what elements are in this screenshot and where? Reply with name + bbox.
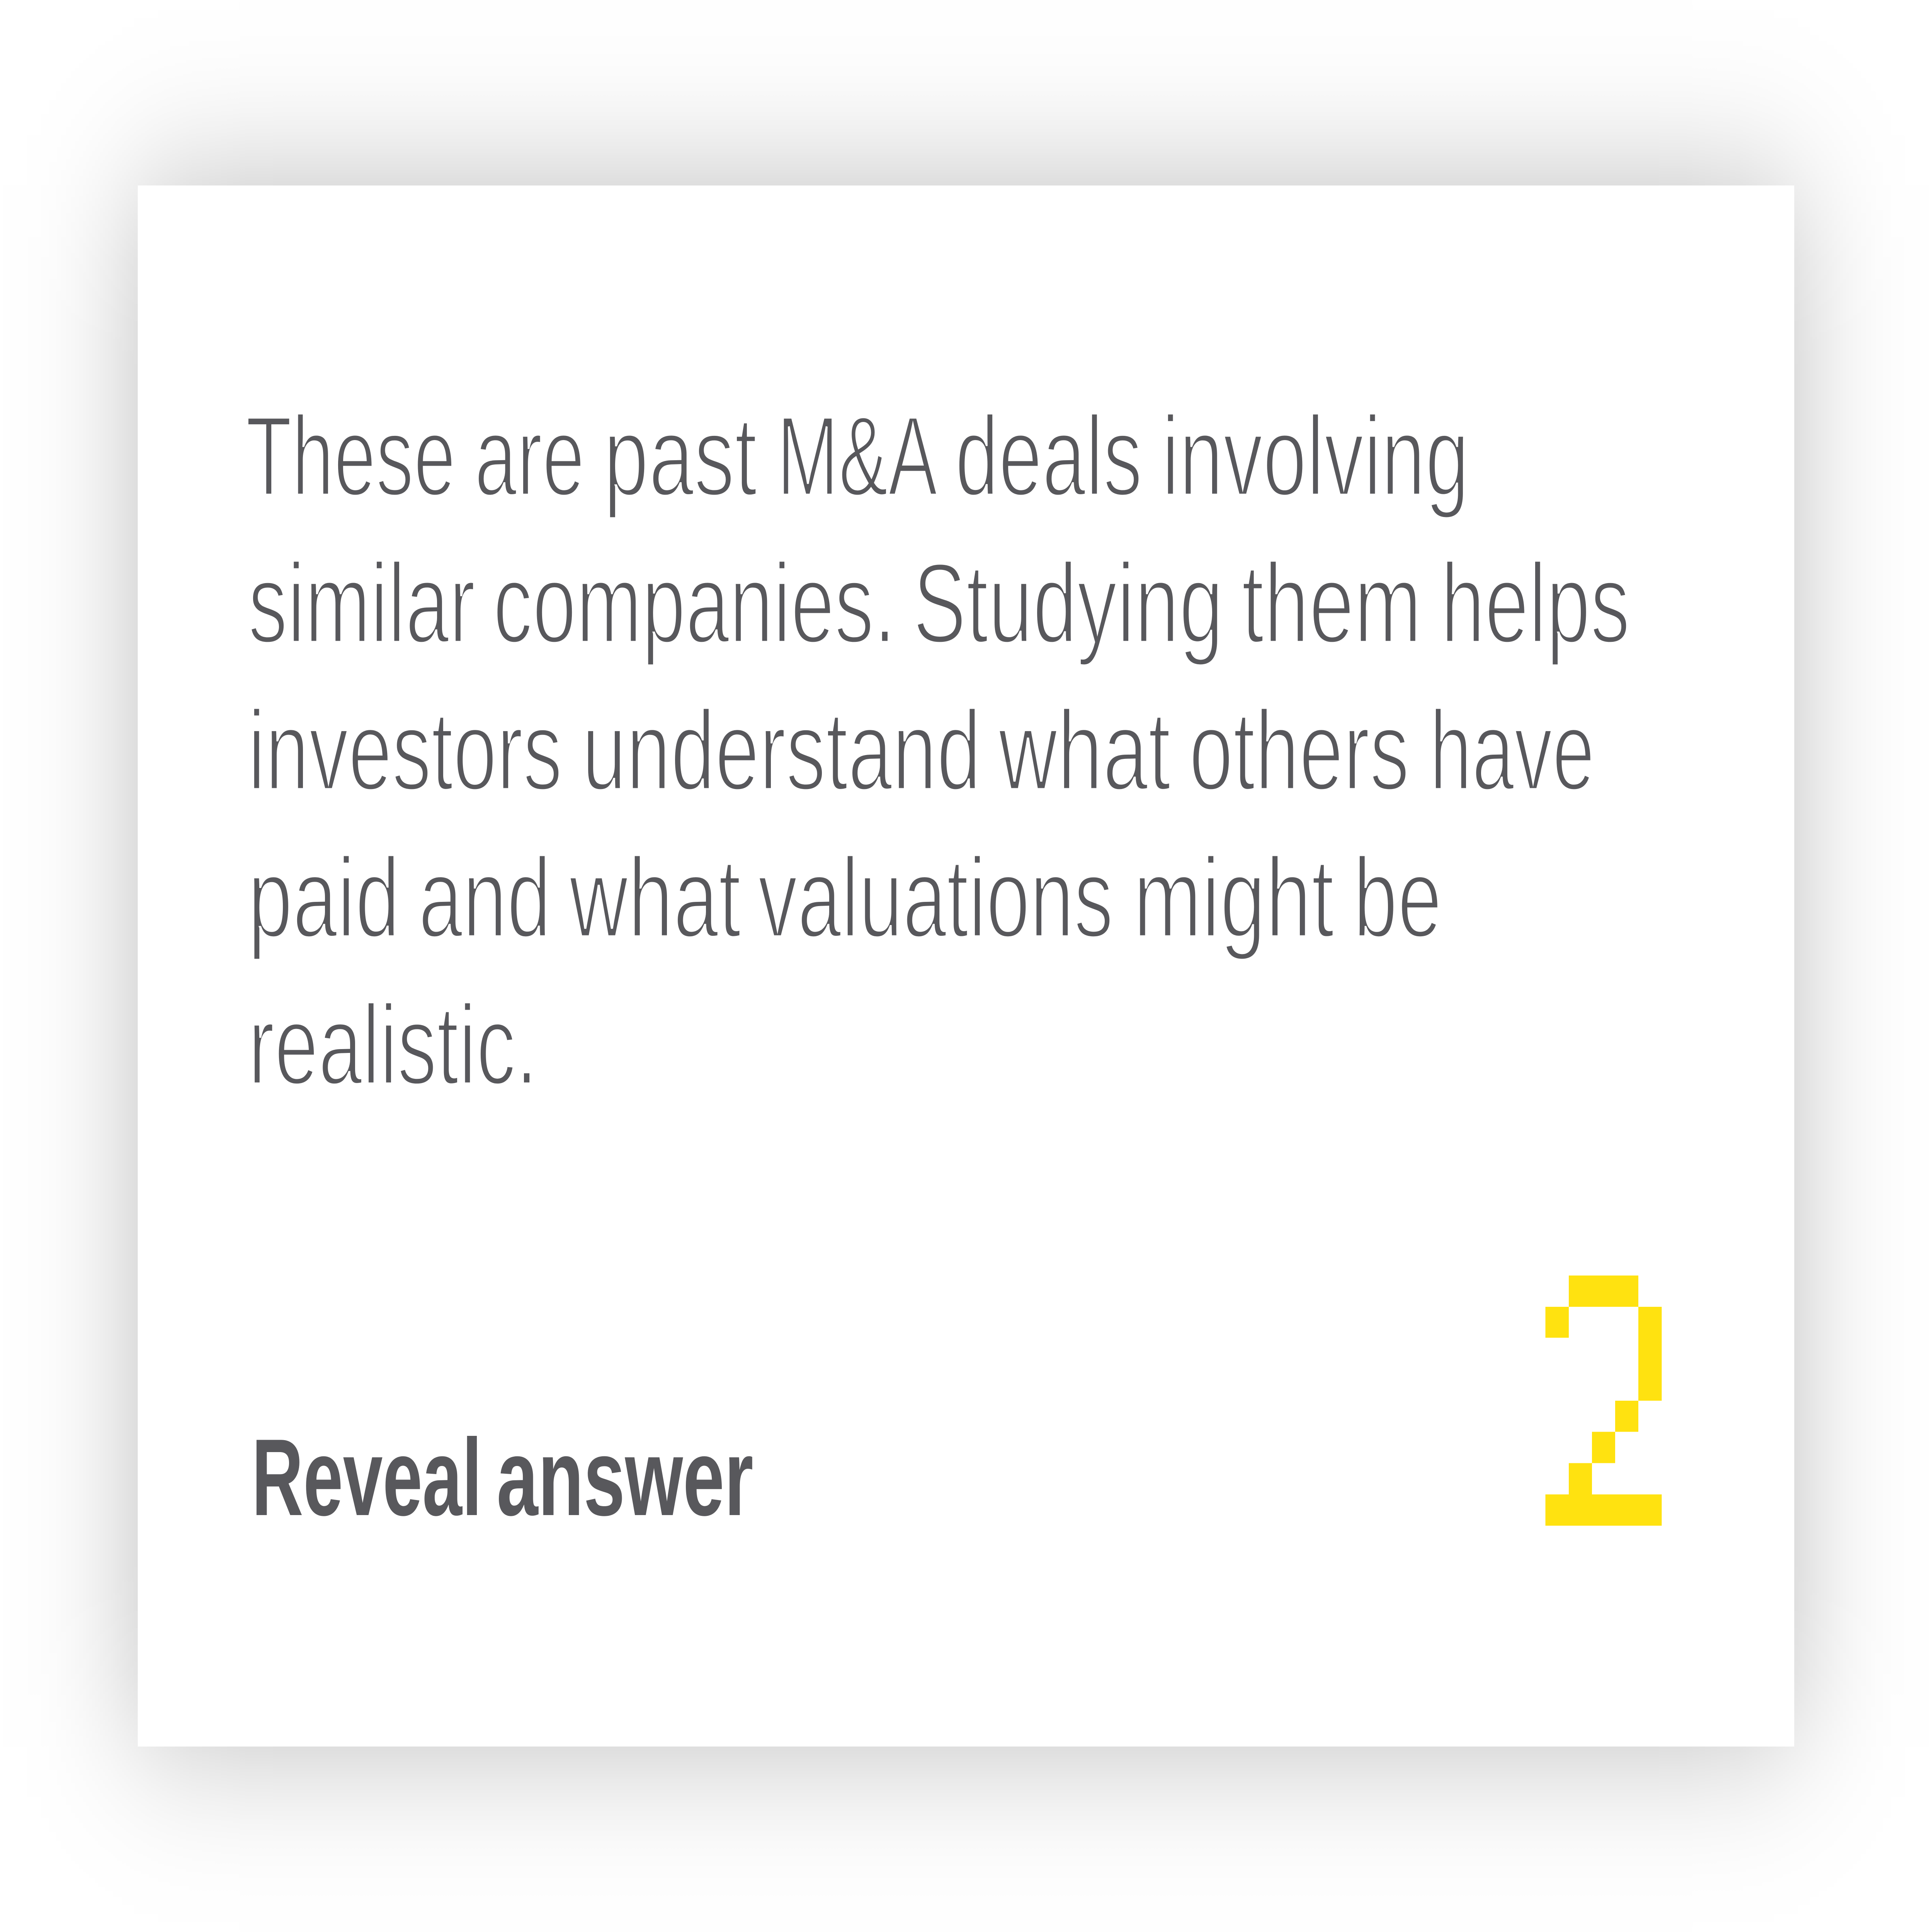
- body line 2: companies.: [493, 540, 896, 667]
- panel: white card: [138, 185, 1794, 1747]
- icon: yellow pixel numeral 2: [1546, 1276, 1662, 1526]
- button label: Reveal answer: [252, 1416, 753, 1538]
- body line 4: might: [1133, 835, 1335, 961]
- body line 1: [246, 393, 1469, 520]
- body line 2: Studying: [913, 540, 1223, 667]
- body line 3: have: [1430, 687, 1595, 814]
- body line 2: similar: [248, 540, 475, 667]
- body line 4: what: [568, 835, 742, 961]
- body line 5: realistic.: [248, 981, 537, 1108]
- body line 1: are: [474, 393, 585, 519]
- body line 1: deals: [955, 393, 1142, 519]
- body line 1: involving: [1162, 393, 1469, 520]
- body line 3: [248, 687, 1595, 814]
- body line 2: helps: [1441, 540, 1630, 667]
- body line 2: them: [1242, 540, 1422, 667]
- body line 4: paid: [248, 835, 400, 961]
- button label: Reveal answer: Reveal: [252, 1416, 482, 1538]
- body line 4: [248, 835, 1442, 961]
- body line 1: These: [246, 393, 456, 519]
- text block: card body copy: [246, 393, 1630, 1108]
- body line 3: what: [997, 687, 1171, 814]
- body line 3: understand: [582, 687, 981, 814]
- body line 1: M&A: [777, 393, 938, 519]
- body line 2: [248, 540, 1630, 667]
- body line 1: past: [604, 393, 757, 520]
- body line 3: investors: [248, 687, 562, 814]
- body line 4: valuations: [758, 835, 1113, 961]
- body line 4: and: [418, 835, 551, 961]
- body line 3: others: [1189, 687, 1409, 814]
- button label: Reveal answer: answer: [497, 1416, 753, 1538]
- body line 4: be: [1353, 835, 1442, 961]
